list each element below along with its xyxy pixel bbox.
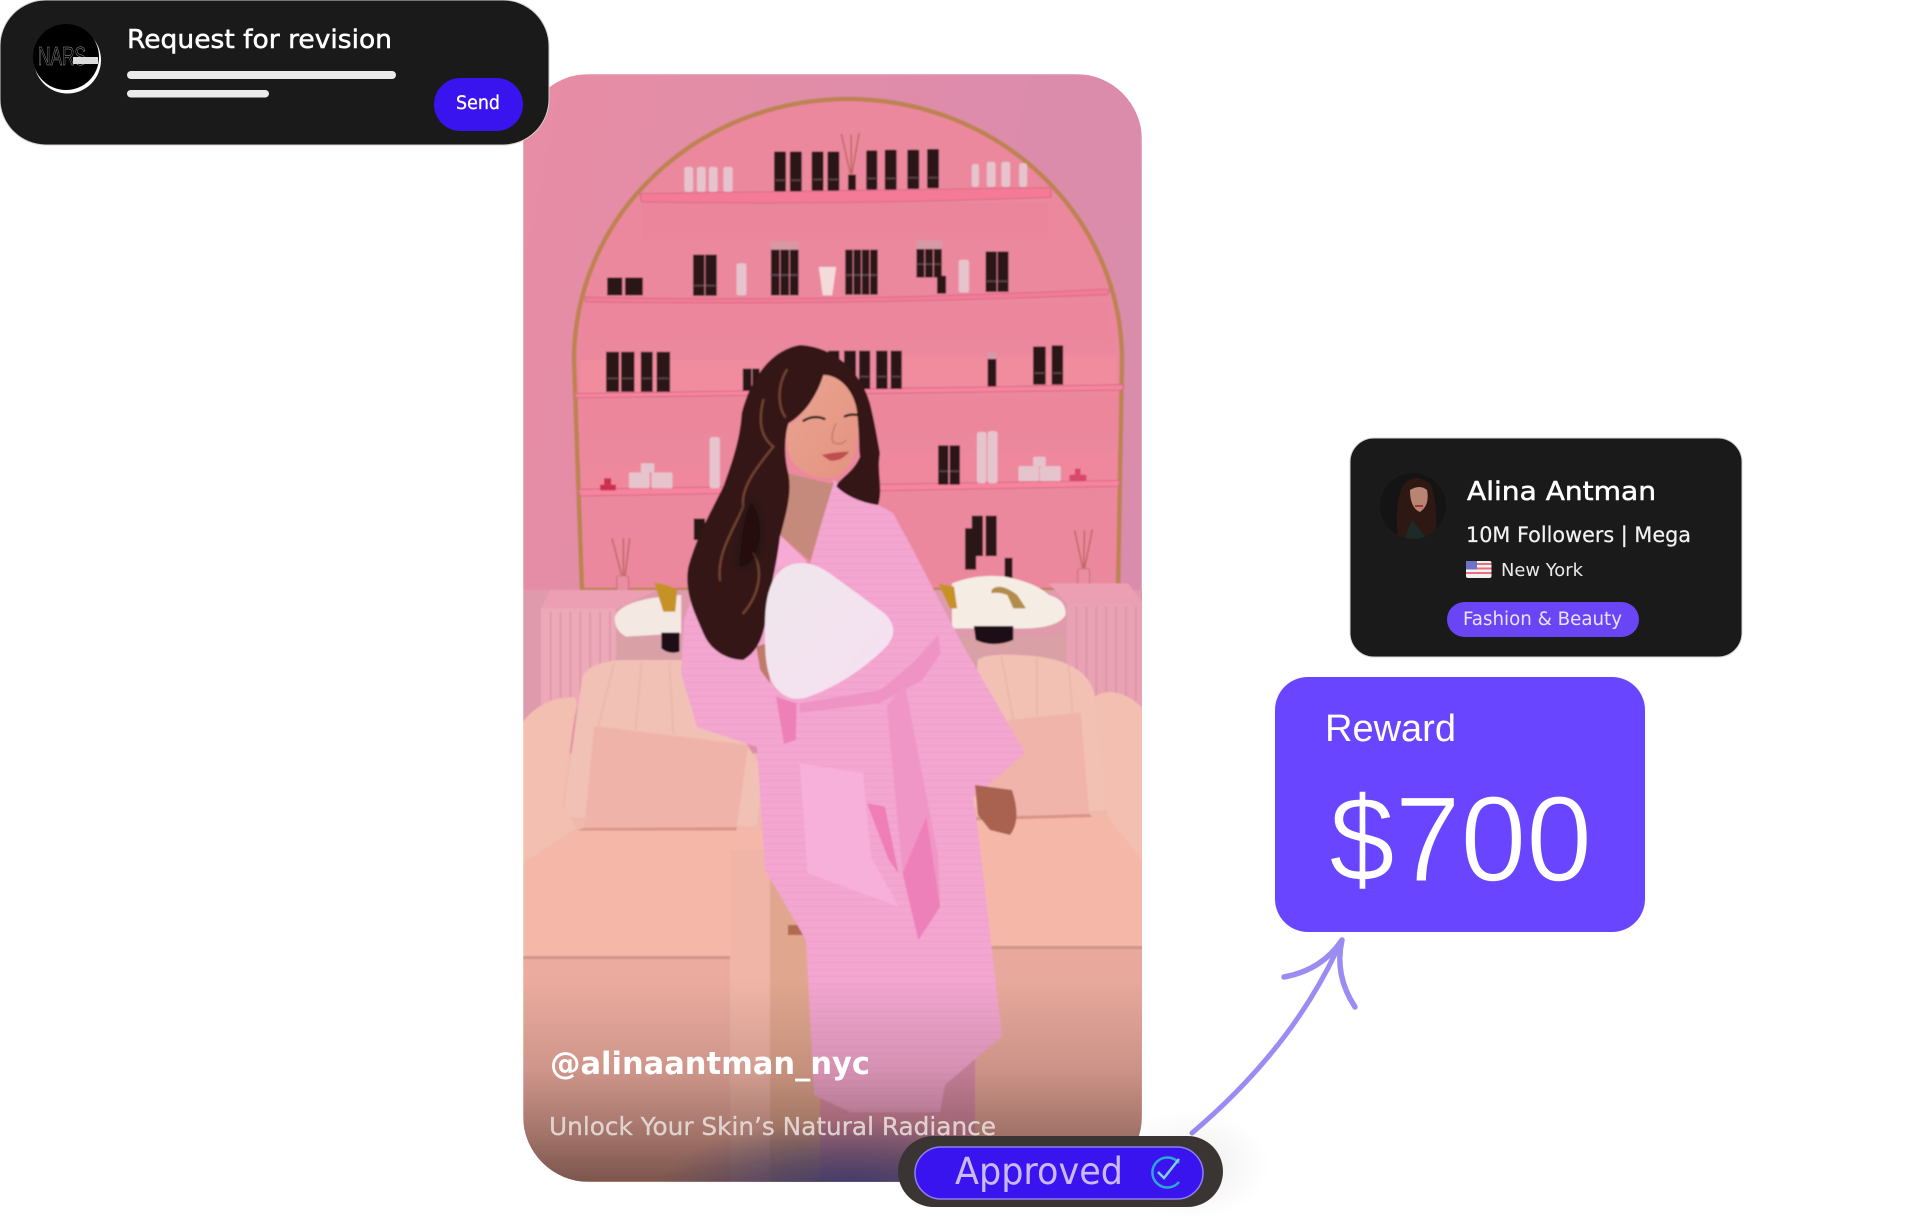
hand	[975, 785, 1017, 835]
category pill	[1447, 602, 1639, 637]
reward label: Reward	[1325, 708, 1456, 750]
caption text: Unlock Your Skin’s Natural Radiance	[549, 1112, 996, 1141]
reward amount: $700	[1329, 771, 1592, 907]
photo wall background	[523, 74, 1142, 1182]
panel: approved badge	[898, 1110, 1270, 1220]
icon: NARS avatar	[33, 24, 101, 94]
icon: US flag	[1466, 561, 1492, 578]
panel: request for revision	[0, 0, 549, 145]
approved label: Approved	[955, 1150, 1123, 1193]
product labels	[607, 177, 1062, 472]
handle text: @alinaantman_nyc	[550, 1046, 870, 1082]
pink salon chairs	[523, 655, 1143, 967]
follower count: 10M Followers | Mega	[1466, 523, 1691, 548]
icon: check circle	[1152, 1158, 1179, 1188]
eyes, nose, lips	[803, 415, 859, 461]
influencer name: Alina Antman	[1467, 477, 1656, 507]
face	[786, 375, 858, 478]
category pill: Fashion & Beauty	[1463, 609, 1622, 630]
send button	[434, 78, 523, 131]
icon: profile avatar	[1397, 478, 1436, 539]
play button	[765, 563, 893, 699]
location: New York	[1501, 560, 1584, 581]
hair mass	[687, 345, 880, 660]
robe	[681, 480, 1025, 1112]
placeholder text lines	[127, 71, 396, 98]
woman head and hair	[687, 345, 880, 660]
shelves and products	[574, 133, 1124, 597]
reed diffusers	[612, 133, 1092, 576]
hair highlights	[720, 370, 787, 613]
bottom fade overlay	[523, 1005, 1142, 1182]
panel: influencer profile	[1350, 438, 1742, 657]
robe belt, pocket and folds	[756, 635, 941, 940]
icon: NARS avatar: NARS	[38, 41, 86, 71]
arrow to reward	[1192, 940, 1355, 1133]
send button: Send	[456, 93, 500, 114]
revision heading: Request for revision	[127, 25, 392, 55]
neck and chest	[778, 473, 834, 561]
panel: video photo card	[523, 74, 1145, 1221]
panel: reward	[1275, 677, 1645, 932]
gold arch shelving niche	[574, 99, 1122, 590]
wash stations and counters	[523, 576, 1143, 723]
